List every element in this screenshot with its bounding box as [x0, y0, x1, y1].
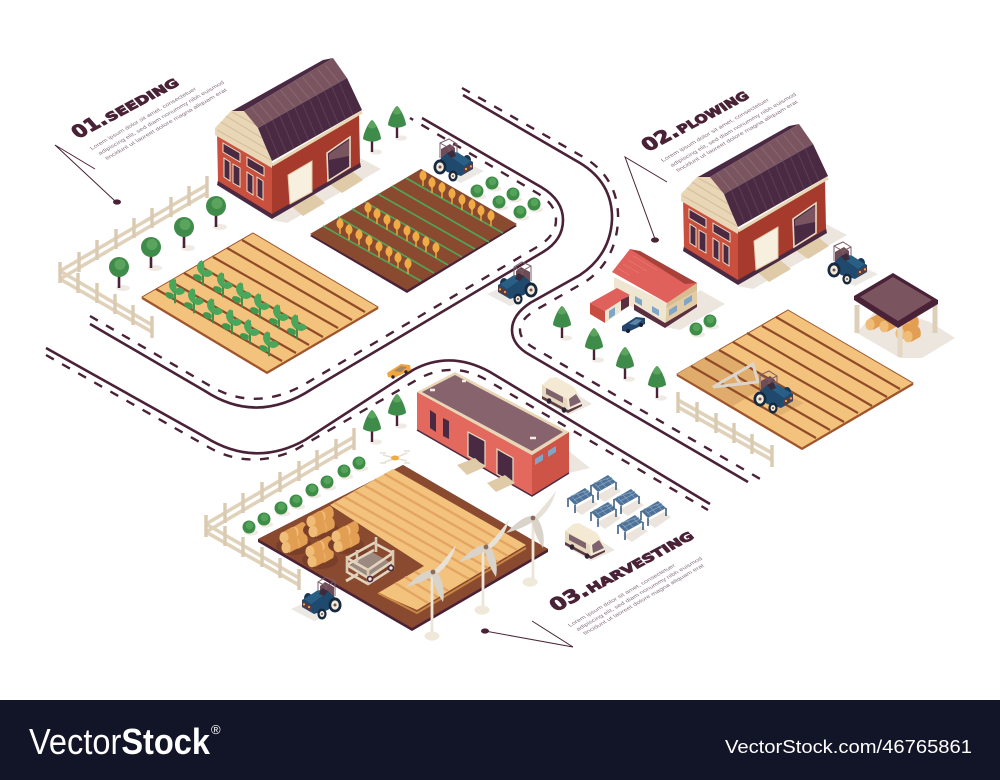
title: 03 harvesting: HARVESTING: [583, 529, 697, 595]
text block: harvesting description: tincidunt ut laoreet dolore magna aliquam erat: [582, 563, 706, 636]
field: harvest: [258, 465, 548, 631]
bushes: near wheat field: [470, 176, 543, 220]
barn: seeding: [215, 58, 381, 223]
footer url: VectorStock.com/46765861: [725, 737, 972, 757]
tractor: by wheat field: [434, 139, 484, 183]
text block: plowing description: tincidunt ut laoreet dolore magna aliquam erat: [675, 100, 800, 173]
trees: seeding row: [109, 196, 227, 291]
text block: plowing description: Lorem ipsum dolor sit amet, consectetuer: [660, 98, 771, 163]
van: by solar panels: [565, 523, 615, 561]
text block: harvesting description: adipiscing elit, sed diam nonummy nibh euismod: [575, 557, 704, 632]
straw strips: [330, 469, 526, 613]
trees: behind seeding barn: [363, 106, 407, 155]
text block: seeding description: tincidunt ut laoreet dolore magna aliquam erat: [104, 88, 229, 161]
car: blue: [622, 317, 645, 333]
leader line: plowing: [625, 157, 667, 243]
trees: along plowing road: [553, 306, 667, 401]
text block: plowing description: adipiscing elit, sed diam nonummy nibh euismod: [669, 93, 798, 168]
footer band: [0, 700, 1000, 780]
plow attachment: [713, 364, 758, 387]
title: 02 plowing: 02.: [637, 122, 684, 156]
plants: seedlings: [165, 260, 307, 356]
road: harvesting bend: [46, 348, 710, 510]
hay under shed: [865, 310, 921, 342]
hay bales: [276, 506, 364, 569]
title: 01 seeding: SEEDING: [102, 75, 182, 124]
panel: 02 plowing heading: [625, 85, 800, 243]
fence: harvesting: [206, 428, 354, 590]
warehouse ramps: [457, 458, 515, 492]
road: plowing bend: [462, 88, 762, 482]
title: 02 plowing: PLOWING: [674, 88, 752, 136]
drone: [380, 451, 410, 463]
warehouse windows: [430, 410, 556, 465]
tractor: by plowing barn: [828, 242, 878, 286]
title: 01 seeding: [67, 72, 183, 143]
road: inner farm loop: [90, 118, 563, 408]
leader line: seeding: [55, 145, 121, 205]
car: orange: [387, 364, 411, 379]
tractor: harvest field: [291, 577, 342, 621]
hay cart: [346, 537, 394, 585]
warehouse: [417, 372, 590, 496]
wind turbines: [406, 491, 556, 641]
garage: [590, 288, 630, 323]
title: 01 seeding: 01.: [67, 110, 112, 143]
title: 02 plowing: [637, 85, 753, 156]
leader line: harvesting: [481, 621, 573, 647]
roads: [46, 88, 762, 510]
title: 03 harvesting: [545, 525, 698, 616]
panel: 01 seeding heading: [55, 72, 229, 205]
plants: wheat: [336, 170, 495, 274]
text block: harvesting description: Lorem ipsum dolor sit amet, consectetuer: [567, 564, 677, 628]
fence: plowing: [678, 392, 772, 467]
field: plowed: [677, 310, 913, 449]
solar panels: [568, 475, 671, 542]
warehouse doors: [468, 432, 513, 483]
field: seedling rows: [142, 233, 378, 373]
text block: seeding description: adipiscing elit, sed diam nonummy nibh euismod: [97, 81, 226, 156]
trees: by warehouse: [363, 394, 407, 445]
house: [590, 249, 725, 330]
footer logo: VectorStock: [29, 721, 211, 762]
tractor: on road: [487, 262, 538, 306]
panel: 03 harvesting heading: [481, 525, 706, 647]
turbine left: [406, 545, 456, 641]
van: on road: [542, 377, 592, 415]
text block: seeding description: Lorem ipsum dolor sit amet, consectetuer: [89, 87, 198, 151]
barn: plowing: [681, 124, 847, 289]
turbine right: [506, 491, 556, 587]
title: 03 harvesting: 03.: [545, 581, 594, 616]
turbine middle: [459, 520, 509, 615]
shed: hay storage: [854, 273, 955, 358]
bushes: near house: [690, 314, 719, 338]
registered mark: ®: [211, 722, 221, 737]
fence: seeding: [60, 176, 207, 338]
bushes: harvesting row: [242, 456, 368, 536]
field: sprouting wheat: [310, 169, 517, 293]
tractor: plowing field: [754, 371, 804, 415]
